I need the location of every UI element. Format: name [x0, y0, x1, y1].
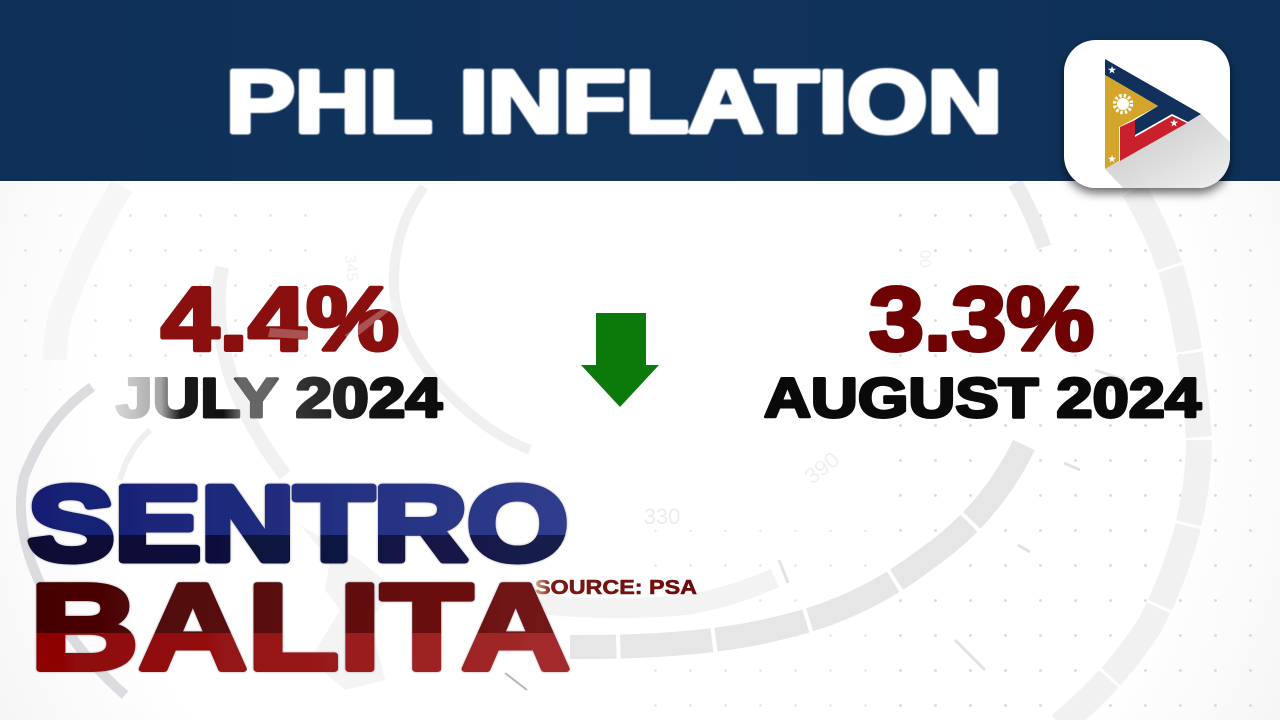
wordmark: Balita: BALITA — [30, 559, 570, 695]
stat: July 2024 — [116, 270, 442, 429]
value: 3.3%: 3.3% — [869, 270, 1094, 370]
arrow: down — [581, 313, 659, 407]
stat: August 2024 — [764, 270, 1201, 429]
icon: app logo: ★ — [1108, 154, 1117, 164]
background panel: 330 — [644, 504, 680, 529]
icon: app logo: ★ — [1170, 118, 1179, 128]
label: August 2024: AUGUST 2024 — [764, 366, 1201, 429]
icon: app logo — [1064, 40, 1235, 190]
icon: app logo: ★ — [1108, 65, 1117, 75]
value: 4.4%: 4.4% — [161, 270, 399, 370]
logo: Sentro Balita — [28, 465, 570, 695]
wordmark: Sentro: SENTRO — [28, 465, 568, 583]
title: PHL INFLATION — [226, 52, 1002, 151]
background panel: 390 — [800, 447, 844, 489]
background panel: 345 — [341, 254, 360, 282]
label: July 2024: JULY 2024 — [116, 366, 442, 429]
source note: SOURCE: PSA — [535, 577, 697, 599]
background panel: 00 — [916, 250, 933, 268]
header bar — [0, 0, 1280, 181]
